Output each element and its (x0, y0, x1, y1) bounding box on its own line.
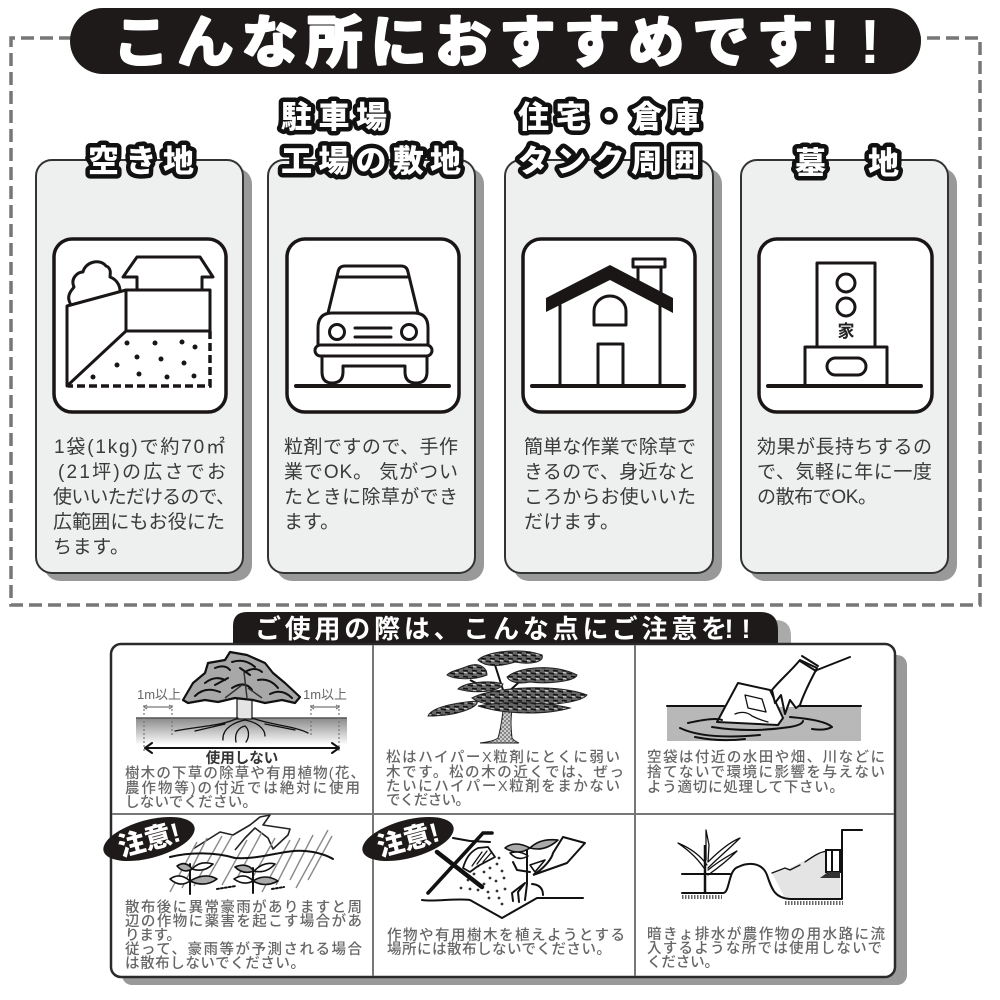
panel: graveyard (741, 146, 957, 581)
icon: car (287, 239, 459, 412)
text: rain caution: は散布しないでください。 (125, 955, 305, 972)
heading: parking and factory grounds: 駐車場 (281, 100, 387, 135)
title banner: ! (820, 8, 840, 77)
icon: house (523, 239, 695, 412)
text: pine caution: 木です。松の木の近くでは、ぜっ (386, 764, 624, 781)
text: empty lot description: 1袋(1kg)で約70㎡ (54, 435, 225, 458)
text: parking description (284, 436, 458, 533)
heading: parking and factory grounds (281, 100, 461, 179)
heading: graveyard: 地 (868, 146, 899, 181)
text: pine caution: でください。 (386, 792, 470, 809)
text: pine caution: 松はハイパーX粒剤にとくに弱い (386, 749, 620, 766)
text: planting caution: 場所には散布しないでください。 (387, 941, 611, 958)
text: bag caution: 空袋は付近の水田や畑、川などに (647, 749, 885, 766)
section tab: cautions heading: ご使用の際は、こんな点にご注意を (255, 614, 727, 644)
illustration: hand planting with cross (422, 833, 585, 918)
callout: caution badge (99, 808, 199, 870)
text: drainage caution: ください。 (647, 954, 719, 971)
text: bag caution (647, 749, 885, 796)
text: graveyard description: 効果が長持ちするの (757, 436, 932, 458)
text: tree caution: しないでください。 (125, 794, 257, 811)
heading: houses, warehouses and tanks: 住宅・倉庫 (518, 100, 700, 135)
text: rain caution: 散布後に異常豪雨がありますと周 (125, 898, 362, 916)
text: pine caution: たいにハイパーX粒剤をまかない (386, 778, 620, 795)
callout: caution badge: 注意! (374, 817, 443, 863)
dashed frame (11, 38, 980, 605)
text: house description: ころからお使いいた (524, 486, 696, 508)
cell: tree roots (125, 652, 365, 811)
text: drainage caution: 入するような所では使用しないで (647, 940, 882, 957)
text: bag caution: よう適切に処理して下さい。 (647, 778, 844, 796)
icon: gravestone: 家 (838, 321, 854, 341)
text: parking description: ます。 (284, 512, 339, 533)
text: graveyard description: の散布でOK。 (757, 486, 877, 508)
heading: houses, warehouses and tanks: タンク周囲 (518, 144, 700, 179)
heading: graveyard (795, 146, 899, 181)
text: empty lot description: (21坪)の広さでお (58, 461, 226, 483)
text: house description (524, 436, 696, 533)
heading: houses, warehouses and tanks (518, 100, 700, 179)
text: rain caution: 辺の作物に薬害を起こす場合があ (125, 912, 362, 930)
text: bag caution: 捨てないで環境に影響を与えない (647, 764, 885, 781)
text: drainage caution: 暗きょ排水が農作物の用水路に流 (647, 925, 886, 943)
illustration: tree with 1m margins: 1m以上 (303, 687, 347, 702)
cell: empty bag (647, 656, 885, 796)
text: empty lot description: 広範囲にもお役にた (53, 511, 225, 533)
panel: parking and factory grounds (268, 100, 484, 581)
heading: empty lot: 空き地 (88, 144, 194, 179)
text: drainage caution (647, 925, 886, 971)
text: rain caution: ります。 (125, 927, 181, 944)
illustration: rain, lightning and plants (170, 815, 333, 894)
text: tree caution: 農作物等)の付近では絶対に使用 (125, 779, 360, 797)
text: empty lot description (53, 435, 235, 558)
icon: gravestone (759, 239, 932, 412)
panel: houses, warehouses and tanks (505, 100, 722, 581)
section tab: cautions heading (233, 612, 791, 655)
title banner: ! (860, 8, 880, 77)
text: parking description: たときに除草ができ (284, 486, 458, 508)
text: graveyard description: で、気軽に年に一度 (757, 461, 932, 483)
heading: parking and factory grounds: 工場の敷地 (281, 144, 461, 179)
text: parking description: 粒剤ですので、手作 (284, 436, 458, 458)
text: graveyard description (757, 436, 932, 508)
text: house description: 簡単な作業で除草で (524, 436, 696, 458)
panel: empty lot (36, 144, 252, 581)
text: planting caution (387, 927, 625, 958)
text: pine caution (386, 749, 624, 809)
text: planting caution: 作物や有用樹木を植えようとする (387, 927, 625, 944)
cell: planting spot (358, 808, 625, 958)
text: rain caution: 従って、豪雨等が予測される場合 (125, 940, 362, 958)
text: tree caution: 樹木の下草の除草や有用植物(花、 (125, 765, 365, 782)
cell: drainage (647, 830, 886, 971)
section tab: cautions heading: ! (742, 614, 750, 644)
text: rain caution (125, 898, 362, 972)
caution table (99, 644, 907, 985)
text: empty lot description: 使いいただけるので、 (53, 486, 235, 508)
section tab: cautions heading: ! (724, 614, 734, 644)
callout: caution badge (358, 808, 458, 870)
heading: graveyard: 墓 (795, 146, 826, 181)
cell: pine (386, 651, 624, 809)
illustration: tree with 1m margins: 1m以上 (137, 687, 181, 702)
text: house description: だけます。 (524, 512, 619, 533)
cell: heavy rain (99, 808, 362, 972)
illustration: tree with 1m margins (136, 652, 347, 767)
illustration: pine tree (428, 651, 587, 743)
illustration: bag in water (667, 656, 861, 741)
icon: empty lot (54, 239, 226, 412)
text: empty lot description: ちます。 (53, 537, 129, 558)
illustration: drainage channel (678, 830, 862, 903)
callout: caution badge: 注意! (115, 817, 184, 863)
text: house description: きるので、身近なと (524, 461, 696, 483)
title banner: こんな所におすすめです (113, 11, 813, 74)
text: tree caution (125, 765, 365, 811)
illustration: tree with 1m margins: 使用しない (206, 749, 278, 767)
text: parking description: 業でOK。 気がつい (284, 461, 458, 483)
